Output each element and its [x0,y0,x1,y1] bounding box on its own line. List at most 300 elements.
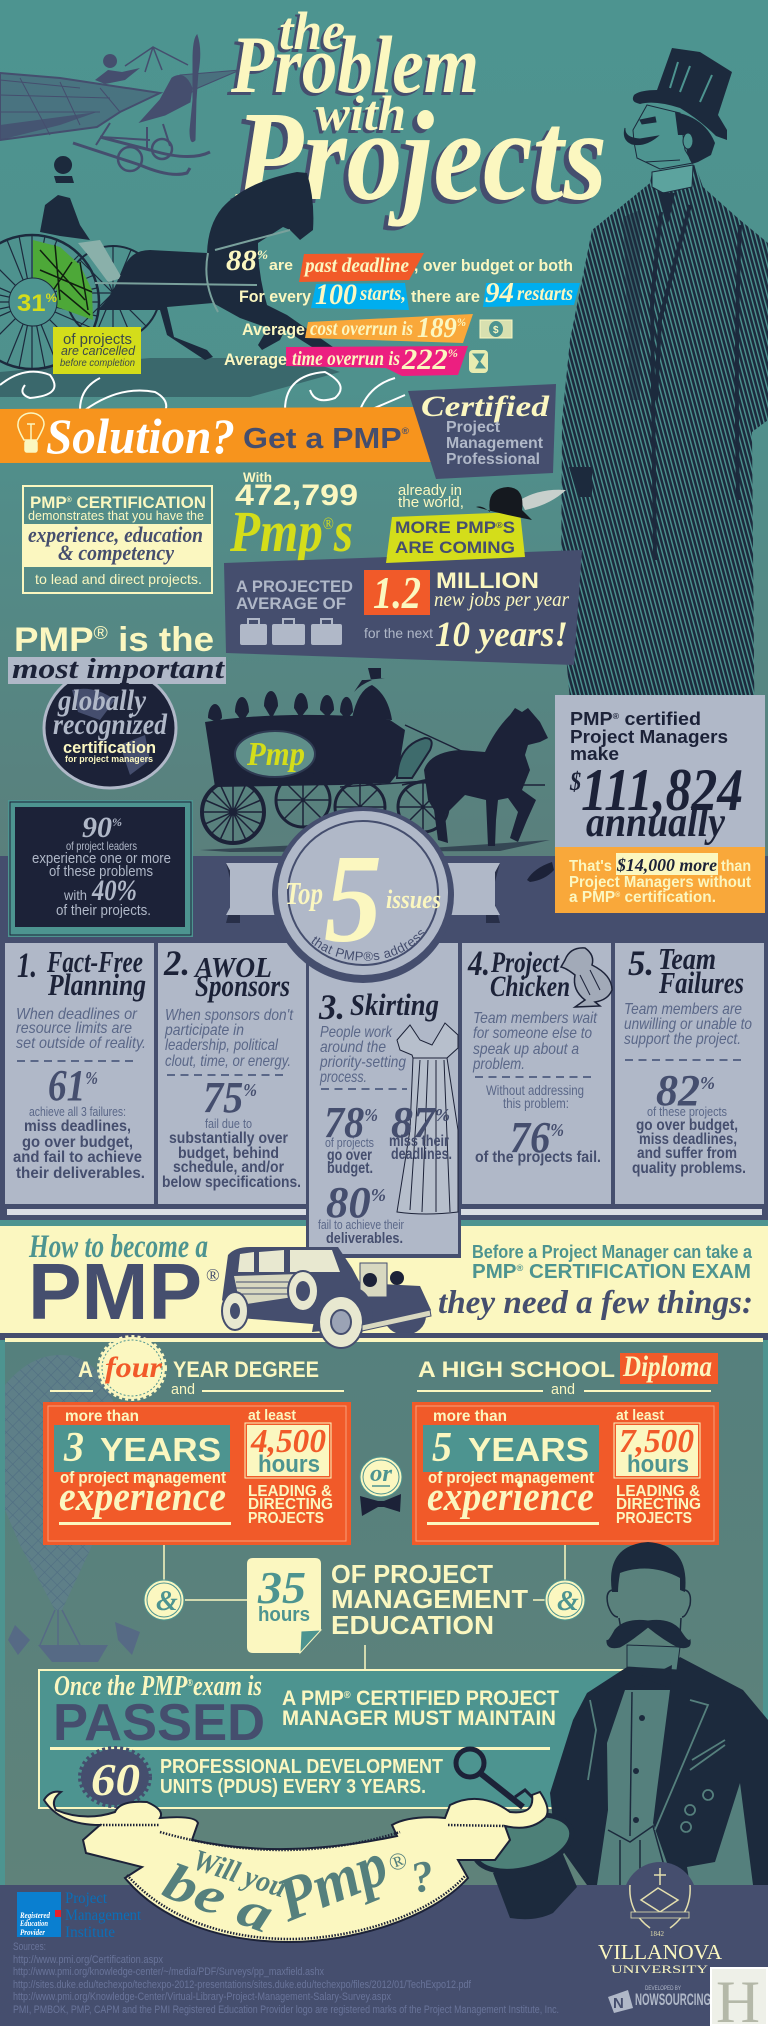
panel: projected jobs: AVERAGE OF [236,594,346,613]
badge: 60 [80,1748,150,1806]
column 5: team failures: of these projects [647,1104,727,1119]
column 3: skirting: deadlines. [391,1146,452,1163]
panel: certified project management professional: Project [446,419,501,436]
callout: more PMPs are coming: S [503,518,515,537]
panel: salary: PMP [570,709,609,729]
stat: cost overrun [242,312,473,344]
column 2: AWOL sponsors: schedule, and/or [173,1159,284,1176]
panel: projected jobs: 10 years! [435,614,568,654]
logo: PMI registered education provider: Education [19,1919,48,1928]
requirement: four year degree: YEAR DEGREE [173,1357,319,1382]
column 1: fact-free planning: go over budget, [22,1134,133,1151]
panel: salary: annually [586,800,725,846]
stat: past deadline: , over budget or both [414,256,573,275]
stat: cost overrun: % [457,315,466,329]
column 2: AWOL sponsors: participate in [164,1022,244,1039]
column 2: AWOL sponsors: clout, time, or energy. [165,1053,291,1070]
panel: PMP certification definition: demonstrates that you have the [28,508,204,523]
logo: NowSourcing: NOWSOURCING [635,1990,711,2009]
callout: more PMPs are coming: ARE COMING [395,538,515,557]
panel: salary: Project Managers without [569,874,752,891]
panel: 90 percent of project leaders: with [63,887,87,903]
sources: http://www.pmi.org/knowledge-center/~/media/PDF/Surveys/pp_maxfield.ashx [13,1966,324,1978]
band: how to become a PMP: PMP [472,1261,515,1283]
panel: 5 years experience: 5 [432,1425,452,1471]
panel: PMP certification definition: & competency [58,540,174,565]
decorative swirls [0,372,405,412]
panel: 90 percent of project leaders: of project leaders [66,839,137,853]
title: Problem [226,22,477,113]
banner: solution: ® [402,426,409,436]
stat: restarts: restarts [517,283,573,305]
column 1: fact-free planning: resource limits are [16,1020,132,1037]
logo: PMI registered education provider [17,1890,141,1941]
column 4: project chicken: Project [490,946,560,979]
requirement: high school diploma: Diploma [622,1350,712,1383]
column 1: fact-free planning: 1. [17,945,37,985]
panel: salary: That's [569,858,612,875]
panel: 5 years experience: hours [627,1451,689,1478]
column 3: skirting: Skirting [350,987,439,1022]
column 3: skirting: % [364,1105,378,1125]
heading: PMP is the most important: ® [94,623,108,643]
badge: top 5 issues: 5 [324,830,382,969]
stat: time overrun: Average [224,350,287,369]
logo: Villanova University: 1842 [650,1930,664,1938]
icon: key [456,1749,535,1807]
requirement: high school diploma [417,1350,718,1398]
requirement: high school diploma: and [551,1381,575,1398]
column 5: team failures: 82 [656,1066,700,1115]
column 3: skirting [306,940,461,1258]
illustration: hearse: Pmp [246,736,305,773]
panel: salary: certification. [620,889,716,906]
callout: projects cancelled [53,327,141,374]
column 2: AWOL sponsors: 2. [163,943,190,983]
icon: dollar bill [480,320,512,338]
logo: Villanova University [598,1862,723,1976]
column 3: skirting: People work [320,1024,393,1041]
column 1: fact-free planning: 61 [48,1061,92,1110]
stat: 472,799 PMPs: With [243,469,272,485]
column 3: skirting: miss their [389,1133,449,1150]
panel: 90 percent of project leaders [8,800,193,937]
stat: 472,799 PMPs: s [333,499,353,564]
title [226,1,607,231]
badge: four: four [105,1351,162,1384]
panel: once passed: PASSED [53,1694,265,1752]
note: 35 hours: hours [258,1604,310,1626]
column 3: skirting: process. [319,1069,367,1086]
ribbon [226,863,500,923]
column 1: fact-free planning: miss deadlines, [24,1118,131,1135]
column 5: team failures [615,941,764,1204]
connector badge: ampersand left [144,1580,184,1620]
callout: projects cancelled: are cancelled [61,343,136,358]
badge: four [99,1337,165,1399]
column 5: team failures: Failures [658,965,744,1000]
column 4: project chicken: Without addressing [486,1082,584,1098]
stat: cost overrun: Average [242,320,305,339]
illustration: horse and carriage [0,156,340,397]
column 4: project chicken: for someone else to [473,1025,592,1042]
callout: more PMPs are coming: the world, [398,494,464,511]
panel: 5 years experience: 7,500 [619,1423,694,1460]
title: the [279,1,345,61]
column 4: project chicken: 4. [467,943,490,983]
stat: time overrun [224,343,468,376]
logo: NowSourcing [608,1986,711,2013]
column 5: team failures: and suffer from [637,1145,737,1162]
column 2: AWOL sponsors: substantially over [169,1130,288,1147]
icon: chick [561,948,612,1007]
column 3: skirting: % [371,1185,386,1205]
illustration: vintage car [222,1247,431,1348]
panel: 5 years experience: experience [427,1473,594,1519]
column 1: fact-free planning: When deadlines or [16,1006,138,1023]
panel: PMP certification definition: PMP [30,493,67,512]
column 2: AWOL sponsors: When sponsors don't [165,1007,293,1024]
illustration: hot air balloon [5,1355,140,1662]
column 3: skirting: 78 [324,1098,368,1147]
illustration: globe badge: globally [57,684,147,717]
column 3: skirting: around the [320,1039,386,1056]
panel: salary: ® [613,712,619,721]
stat: cost overrun: cost overrun is [310,318,413,340]
requirement: four year degree: and [171,1381,195,1398]
panel: projected jobs: A PROJECTED [236,577,353,596]
navy section backgrounds [0,856,768,1340]
stat: past deadline: are [269,257,293,274]
band: how to become a PMP: PMP [28,1247,202,1336]
illustration: globe badge [44,668,176,788]
connector badge: ampersand right [545,1580,585,1620]
panel: 90 percent of project leaders: % [112,815,122,829]
icon: dollar bill: $ [493,325,499,336]
callout: more PMPs are coming: MORE PMP [395,518,488,537]
logo: PMI registered education provider: Institute [65,1924,115,1941]
panel: certified project management professional: Certified [421,390,550,423]
panel: 3 years experience: at least [248,1407,296,1424]
column 2: AWOL sponsors [158,943,306,1204]
panel: salary: 111,824 [581,757,743,823]
stat: past deadline [226,244,573,282]
stat: restarts: 100 [315,278,357,311]
badge: or with bow tie [360,1457,402,1516]
column 2: AWOL sponsors: below specifications. [162,1174,301,1191]
banner: will you be a PMP: Will you [189,1843,290,1904]
column 3: skirting: go over [327,1147,372,1164]
sources: Sources: [13,1941,46,1953]
panel: salary: certified [619,709,701,729]
badge: or with bow tie: or [370,1461,393,1487]
panel: 90 percent of project leaders: 40% [91,874,137,907]
column 3: skirting: 3. [318,987,345,1027]
column 5: team failures: Team members are [624,1001,742,1018]
column 3: skirting: 80 [326,1178,370,1227]
panel: certified project management professional: Professional [446,451,540,468]
panel: salary: a PMP [569,889,617,906]
background [0,0,768,860]
panel: 90 percent of project leaders: of their projects. [56,902,151,919]
panel: once passed: MANAGER MUST MAINTAIN [282,1707,556,1730]
column 4: project chicken: problem. [472,1056,525,1073]
footer background [0,1885,768,2026]
title: the [276,4,342,64]
logo: NowSourcing: DEVELOPED BY [645,1986,681,1992]
banner: solution [0,407,431,464]
note: 35 hours [247,1558,321,1653]
connector badge: ampersand right: & [557,1586,579,1617]
banner: will you be a PMP: ? [407,1850,439,1903]
panel: PMP certification definition: experience, education [28,522,203,547]
requirement: high school diploma: A HIGH SCHOOL [418,1357,615,1382]
requirement: four year degree [50,1337,344,1399]
panel: 3 years experience: of project management [60,1468,226,1487]
panel: 5 years experience: YEARS [468,1431,589,1468]
illustration: airplane [0,35,240,174]
banner: will you be a PMP: Pmp [267,1830,397,1935]
stat: cost overrun: 189 [417,312,460,344]
column 5: team failures: % [700,1073,715,1093]
column 1: fact-free planning: achieve all 3 failures: [29,1104,126,1119]
stat: past deadline: 88 [226,244,256,277]
column 2: AWOL sponsors: budget, behind [178,1145,279,1162]
panel: projected jobs: MILLION [436,568,539,593]
panel: once passed: ® [344,1690,351,1701]
panel: 5 years experience: PROJECTS [616,1510,692,1527]
column 2: AWOL sponsors: Sponsors [195,968,290,1003]
stat: restarts: there are [411,287,480,306]
panel: projected jobs [224,550,582,665]
illustration: globe badge: recognized [53,708,168,741]
panel: 3 years experience: more than [65,1408,139,1425]
panel: salary: $14,000 more [616,855,717,875]
panel: PMP certification definition: ® [67,496,73,504]
panel: salary: Project Managers [570,727,728,747]
banner: solution: Solution? [46,408,235,464]
panel: 3 years experience: YEARS [100,1431,221,1468]
column 5: team failures: support the project. [624,1031,741,1048]
icon: hourglass [469,350,488,373]
text: of project management education: OF PROJECT [331,1559,493,1589]
sources [13,1941,559,2016]
panel: PMP certification definition: CERTIFICATION [72,493,206,512]
text: of project management education [331,1559,528,1640]
panel: certified project management professional [408,384,556,479]
panel: PMP certification definition [23,486,212,593]
column 2: AWOL sponsors: % [243,1080,257,1100]
panel: 5 years experience: at least [616,1407,664,1424]
column 3: skirting: 87 [391,1098,435,1147]
note: 35 hours: 35 [257,1562,306,1613]
callout: projects cancelled: of projects [63,331,132,348]
panel: once passed: CERTIFIED PROJECT [351,1687,559,1710]
callout: projects cancelled: before completion [60,358,135,369]
column 4: project chicken: this problem: [503,1095,569,1111]
column 2: AWOL sponsors: fail due to [205,1116,252,1131]
stat: restarts: For every [239,287,312,306]
illustration: globe badge: certification [63,738,156,757]
badge: top 5 issues: issues [386,885,441,914]
heading: PMP is the most important [8,621,226,685]
lower panel background [5,1338,763,1885]
stat: restarts: starts, [359,283,406,305]
logo: PMI registered education provider: Provider [20,1928,46,1937]
banner: will you be a PMP [44,1792,548,1945]
illustration: gentleman with moustache [468,1542,768,1919]
column 4: project chicken: % [550,1120,564,1140]
panel: once passed: A PMP [282,1687,348,1710]
logo: Villanova University: UNIVERSITY [611,1962,708,1976]
column 5: team failures: 5. [628,943,654,983]
badge: top 5 issues: that PMP®s address [312,930,425,961]
sources: PMI, PMBOK, PMP, CAPM and the PMI Registered Education Provider logo are registered marks of the Project Management Institute, Inc. [13,2004,559,2016]
column 3: skirting: budget. [327,1160,373,1177]
column 5: team failures: Team [658,941,716,976]
icon: dress [397,1023,458,1214]
column 3: skirting: fail to achieve their [318,1217,405,1232]
band: how to become a PMP: ® [206,1265,220,1285]
illustration: top hat gentleman [561,48,768,834]
logo: PMI registered education provider: Project [65,1890,108,1907]
column 5: team failures: quality problems. [632,1160,746,1177]
column 1: fact-free planning: and fail to achieve [13,1149,142,1166]
column 3: skirting: priority-setting [319,1054,406,1071]
panel: salary [555,695,765,913]
panel: once passed: PROFESSIONAL DEVELOPMENT [160,1756,443,1778]
sources: http://sites.duke.edu/techexpo/techexpo-2012-presentations/sites.duke.edu/techexpo/files/2012/01/TechExpo12.pdf [13,1979,472,1991]
panel: salary: ® [615,891,621,899]
callout: more PMPs are coming: ® [496,521,503,530]
divider strips [7,1209,762,1215]
column 1: fact-free planning: % [85,1068,98,1088]
panel: 5 years experience: more than [433,1408,507,1425]
panel: 3 years experience: hours [258,1451,320,1478]
logo: PMI registered education provider: Registered [19,1911,51,1920]
heading: PMP is the most important: PMP [14,621,88,659]
panel: projected jobs: new jobs per year [434,589,569,611]
panel: 3 years experience: experience [59,1473,226,1519]
stat: 472,799 PMPs: ® [323,514,334,533]
title: Projects [234,85,607,227]
panel: once passed: Once the PMP [54,1671,224,1702]
column 1: fact-free planning: Fact-Free [46,944,143,979]
sources: http://www.pmi.org/Knowledge-Center/Virtual-Library-Project-Management-Salary-Survey.aspx [13,1991,391,2003]
illustration: hearse [200,668,550,852]
panel: salary: $ [569,767,581,796]
title: Projects [229,89,602,231]
badge: 60: 60 [91,1754,140,1805]
stat: 472,799 PMPs: 472,799 [235,479,358,512]
panel: 3 years experience [43,1402,351,1545]
logo: NowSourcing: N [613,1995,624,2012]
column 4: project chicken: Team members wait [473,1010,597,1027]
column 2: AWOL sponsors: 75 [203,1073,247,1122]
panel: once passed: UNITS (PDUS) EVERY 3 YEARS. [160,1776,426,1798]
column 1: fact-free planning: their deliverables. [16,1165,145,1182]
icon: briefcases [240,619,342,645]
column 4: project chicken: of the projects fail. [475,1149,601,1166]
column 2: AWOL sponsors: AWOL [193,952,272,984]
stats block [224,244,580,376]
panel: 3 years experience: 3 [63,1425,84,1471]
stat: 31%: 31 [17,290,44,317]
banner: will you be a PMP: ® [385,1847,411,1878]
band: how to become a PMP: How to become a [28,1229,208,1265]
stat: time overrun: time overrun is [292,348,400,370]
panel: 3 years experience: 4,500 [250,1423,326,1460]
banner: will you be a PMP: be a [156,1853,281,1945]
panel: 90 percent of project leaders: 90 [82,811,112,844]
column 4: project chicken: 76 [510,1113,554,1162]
panel: 90 percent of project leaders: experience one or more [32,850,171,867]
panel: 5 years experience [412,1402,719,1545]
column 2: AWOL sponsors: leadership, political [165,1037,278,1054]
column 1: fact-free planning [5,943,154,1204]
band: how to become a PMP [0,1226,768,1338]
stat: time overrun: % [448,346,458,360]
column 3: skirting: % [435,1105,450,1125]
title: with [313,88,403,144]
band: how to become a PMP: CERTIFICATION EXAM [523,1261,751,1283]
heading: PMP is the most important: is the [108,621,214,659]
badge: top 5 issues [226,807,500,983]
panel: 3 years experience: PROJECTS [248,1510,324,1527]
requirement: four year degree: A [78,1357,93,1382]
31% pie wedge [33,240,93,320]
panel: salary: make [570,744,619,764]
badge: top 5 issues: Top [285,875,323,911]
stat: 31%: % [46,291,57,305]
column 4: project chicken: speak up about a [473,1041,579,1058]
text: of project management education: MANAGEMENT [331,1584,528,1614]
column 4: project chicken [462,943,612,1204]
stat: restarts: 94 [485,278,514,309]
panel: 3 years experience: DIRECTING [248,1496,333,1513]
panel: 3 years experience: LEADING & [248,1483,332,1500]
stat: 472,799 PMPs [229,469,358,564]
title: with [316,85,406,141]
sources: http://www.pmi.org/Certification.aspx [13,1954,163,1966]
column 4: project chicken: Chicken [490,970,570,1003]
icon: light bulb [18,413,44,452]
band: how to become a PMP: ® [516,1263,524,1273]
connector badge: ampersand left: & [156,1586,178,1617]
panel: certified project management professional: Management [446,435,544,452]
column 5: team failures: miss deadlines, [639,1131,737,1148]
text: of project management education: EDUCATION [331,1610,494,1640]
panel: once passed: exam is [193,1671,262,1702]
panel: projected jobs: for the next [364,625,433,641]
stat: time overrun: 222 [402,343,447,376]
column 1: fact-free planning: set outside of reality. [16,1035,146,1052]
icon: shoe [527,862,554,882]
stat: past deadline: % [257,247,268,262]
illustration: globe badge: for project managers [65,754,153,764]
banner: solution: Get a PMP [243,423,386,455]
logo: Villanova University: VILLANOVA [598,1940,723,1964]
panel: once passed: ® [187,1678,193,1689]
callout: more PMPs are coming [386,482,566,563]
column 1: fact-free planning: Planning [47,967,146,1002]
panel: salary: than [721,858,751,875]
panel: 90 percent of project leaders: of these problems [49,863,153,880]
panel: 5 years experience: of project management [428,1468,594,1487]
band: how to become a PMP: they need a few things: [438,1285,753,1321]
callout: more PMPs are coming: already in [398,482,462,499]
heading: PMP is the most important: most important [12,654,225,685]
